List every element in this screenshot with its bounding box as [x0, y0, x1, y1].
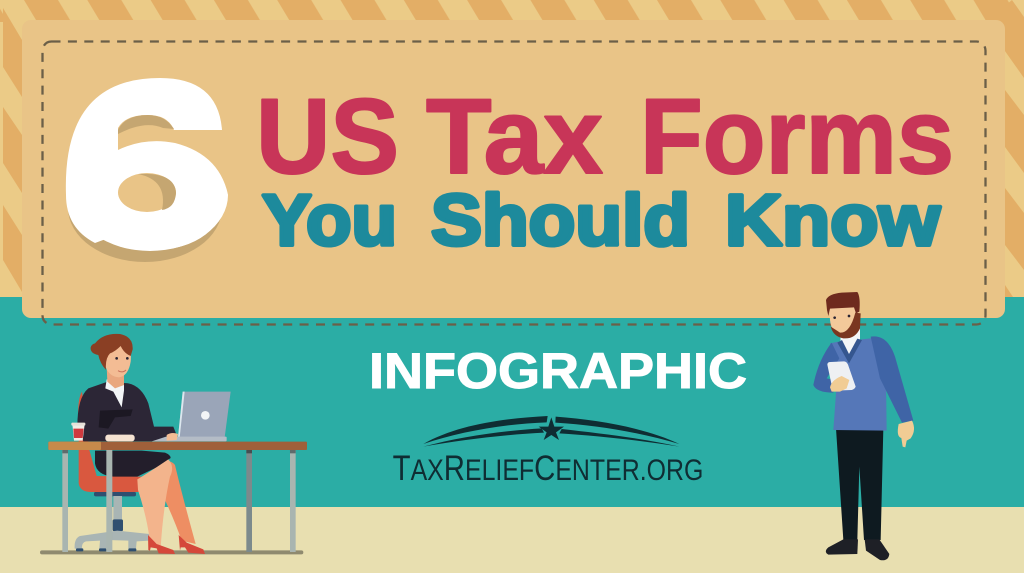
tablet [827, 361, 856, 391]
logo arcs [423, 416, 679, 447]
jacket pocket [99, 409, 133, 429]
striped background band [0, 0, 1024, 297]
sweater collar [837, 339, 862, 363]
legs [137, 459, 196, 547]
office chair [75, 392, 149, 551]
blouse collar [105, 379, 178, 441]
left arm [813, 343, 839, 393]
number upper opening [118, 115, 240, 200]
logo wordmark: TAXRELIEFCENTER.ORG [393, 449, 703, 488]
skirt [95, 451, 171, 477]
floor [0, 507, 1024, 573]
beard [831, 313, 861, 338]
logo: Tax Relief Center [393, 416, 703, 488]
right arm [871, 336, 913, 423]
floor shadow [40, 550, 303, 554]
coffee cup [71, 423, 85, 441]
title line 1: Tax [426, 76, 603, 196]
number body fill [66, 78, 228, 251]
pointing hand [898, 421, 914, 447]
infographic label: INFOGRAPHIC [369, 343, 747, 399]
title line 1: US [256, 76, 399, 196]
title line 2: You [262, 181, 397, 261]
head [829, 307, 859, 337]
number glyph: 6 [74, 52, 224, 283]
number lower opening [118, 173, 176, 212]
trousers [836, 428, 883, 540]
hand on tablet [830, 376, 849, 392]
title line 1 [256, 76, 954, 196]
laptop [152, 392, 231, 441]
sweater [830, 337, 887, 431]
shoes [826, 539, 889, 560]
teal band [0, 297, 1024, 507]
head and hair [91, 334, 133, 388]
neck [840, 327, 860, 360]
woman at desk illustration [40, 334, 307, 554]
big number 6 [66, 52, 240, 283]
man with tablet illustration [813, 292, 914, 560]
dashed stitched border [42, 42, 986, 324]
title line 1: Forms [640, 76, 954, 196]
hair [826, 292, 860, 316]
banner panel [22, 20, 1005, 318]
jacket [77, 382, 176, 441]
red shoes [148, 535, 205, 554]
title line 2 [262, 181, 941, 261]
title line 2: Know [725, 181, 941, 261]
number shadow [68, 154, 222, 262]
desk [48, 442, 307, 552]
logo star [539, 417, 564, 440]
title line 2: Should [431, 181, 690, 261]
